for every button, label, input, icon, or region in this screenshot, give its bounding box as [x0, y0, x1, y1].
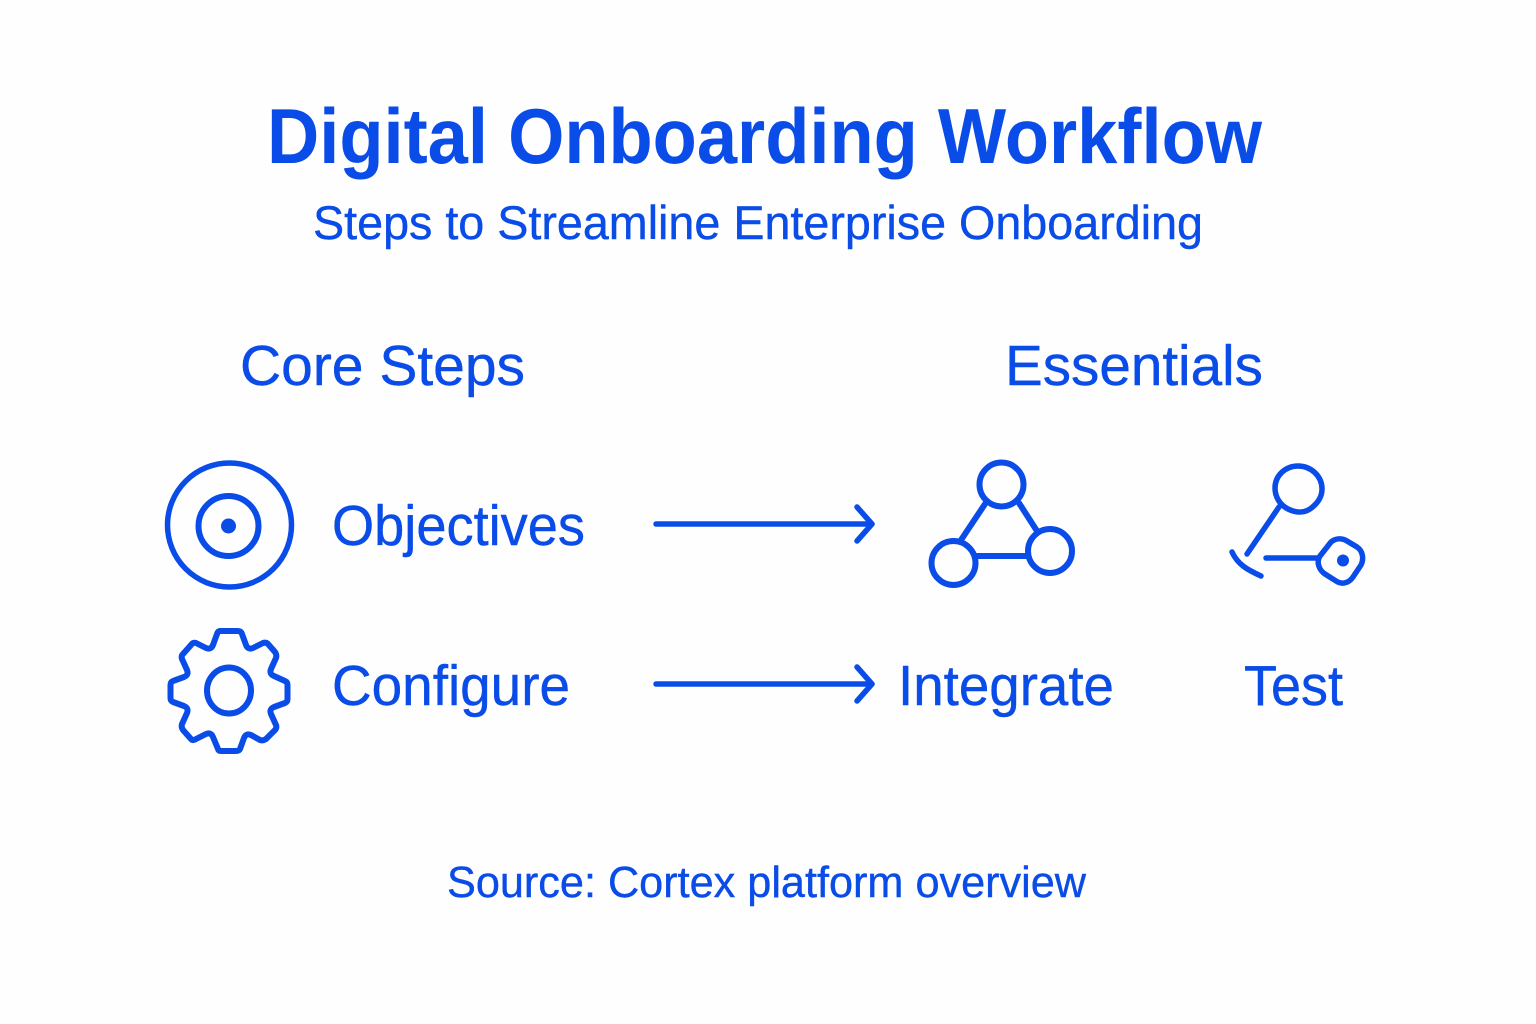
- label: configure: Configure: [332, 654, 570, 718]
- icon: network triangle: [932, 462, 1072, 585]
- label: test: Test: [1244, 654, 1343, 718]
- heading: essentials: Essentials: [1005, 334, 1263, 398]
- title: Digital Onboarding Workflow: [267, 92, 1262, 180]
- icon: target: [168, 463, 292, 587]
- label: objectives: Objectives: [332, 494, 585, 558]
- label: integrate: Integrate: [898, 654, 1114, 718]
- icon: test probe: [1232, 466, 1363, 583]
- icon: gear: [170, 631, 288, 751]
- heading: core steps: Core Steps: [240, 334, 525, 398]
- arrow: objectives to essentials: [656, 507, 872, 541]
- source note: Source: Cortex platform overview: [447, 858, 1086, 907]
- arrow: configure to integrate: [656, 667, 872, 701]
- subtitle: Steps to Streamline Enterprise Onboarding: [313, 196, 1203, 249]
